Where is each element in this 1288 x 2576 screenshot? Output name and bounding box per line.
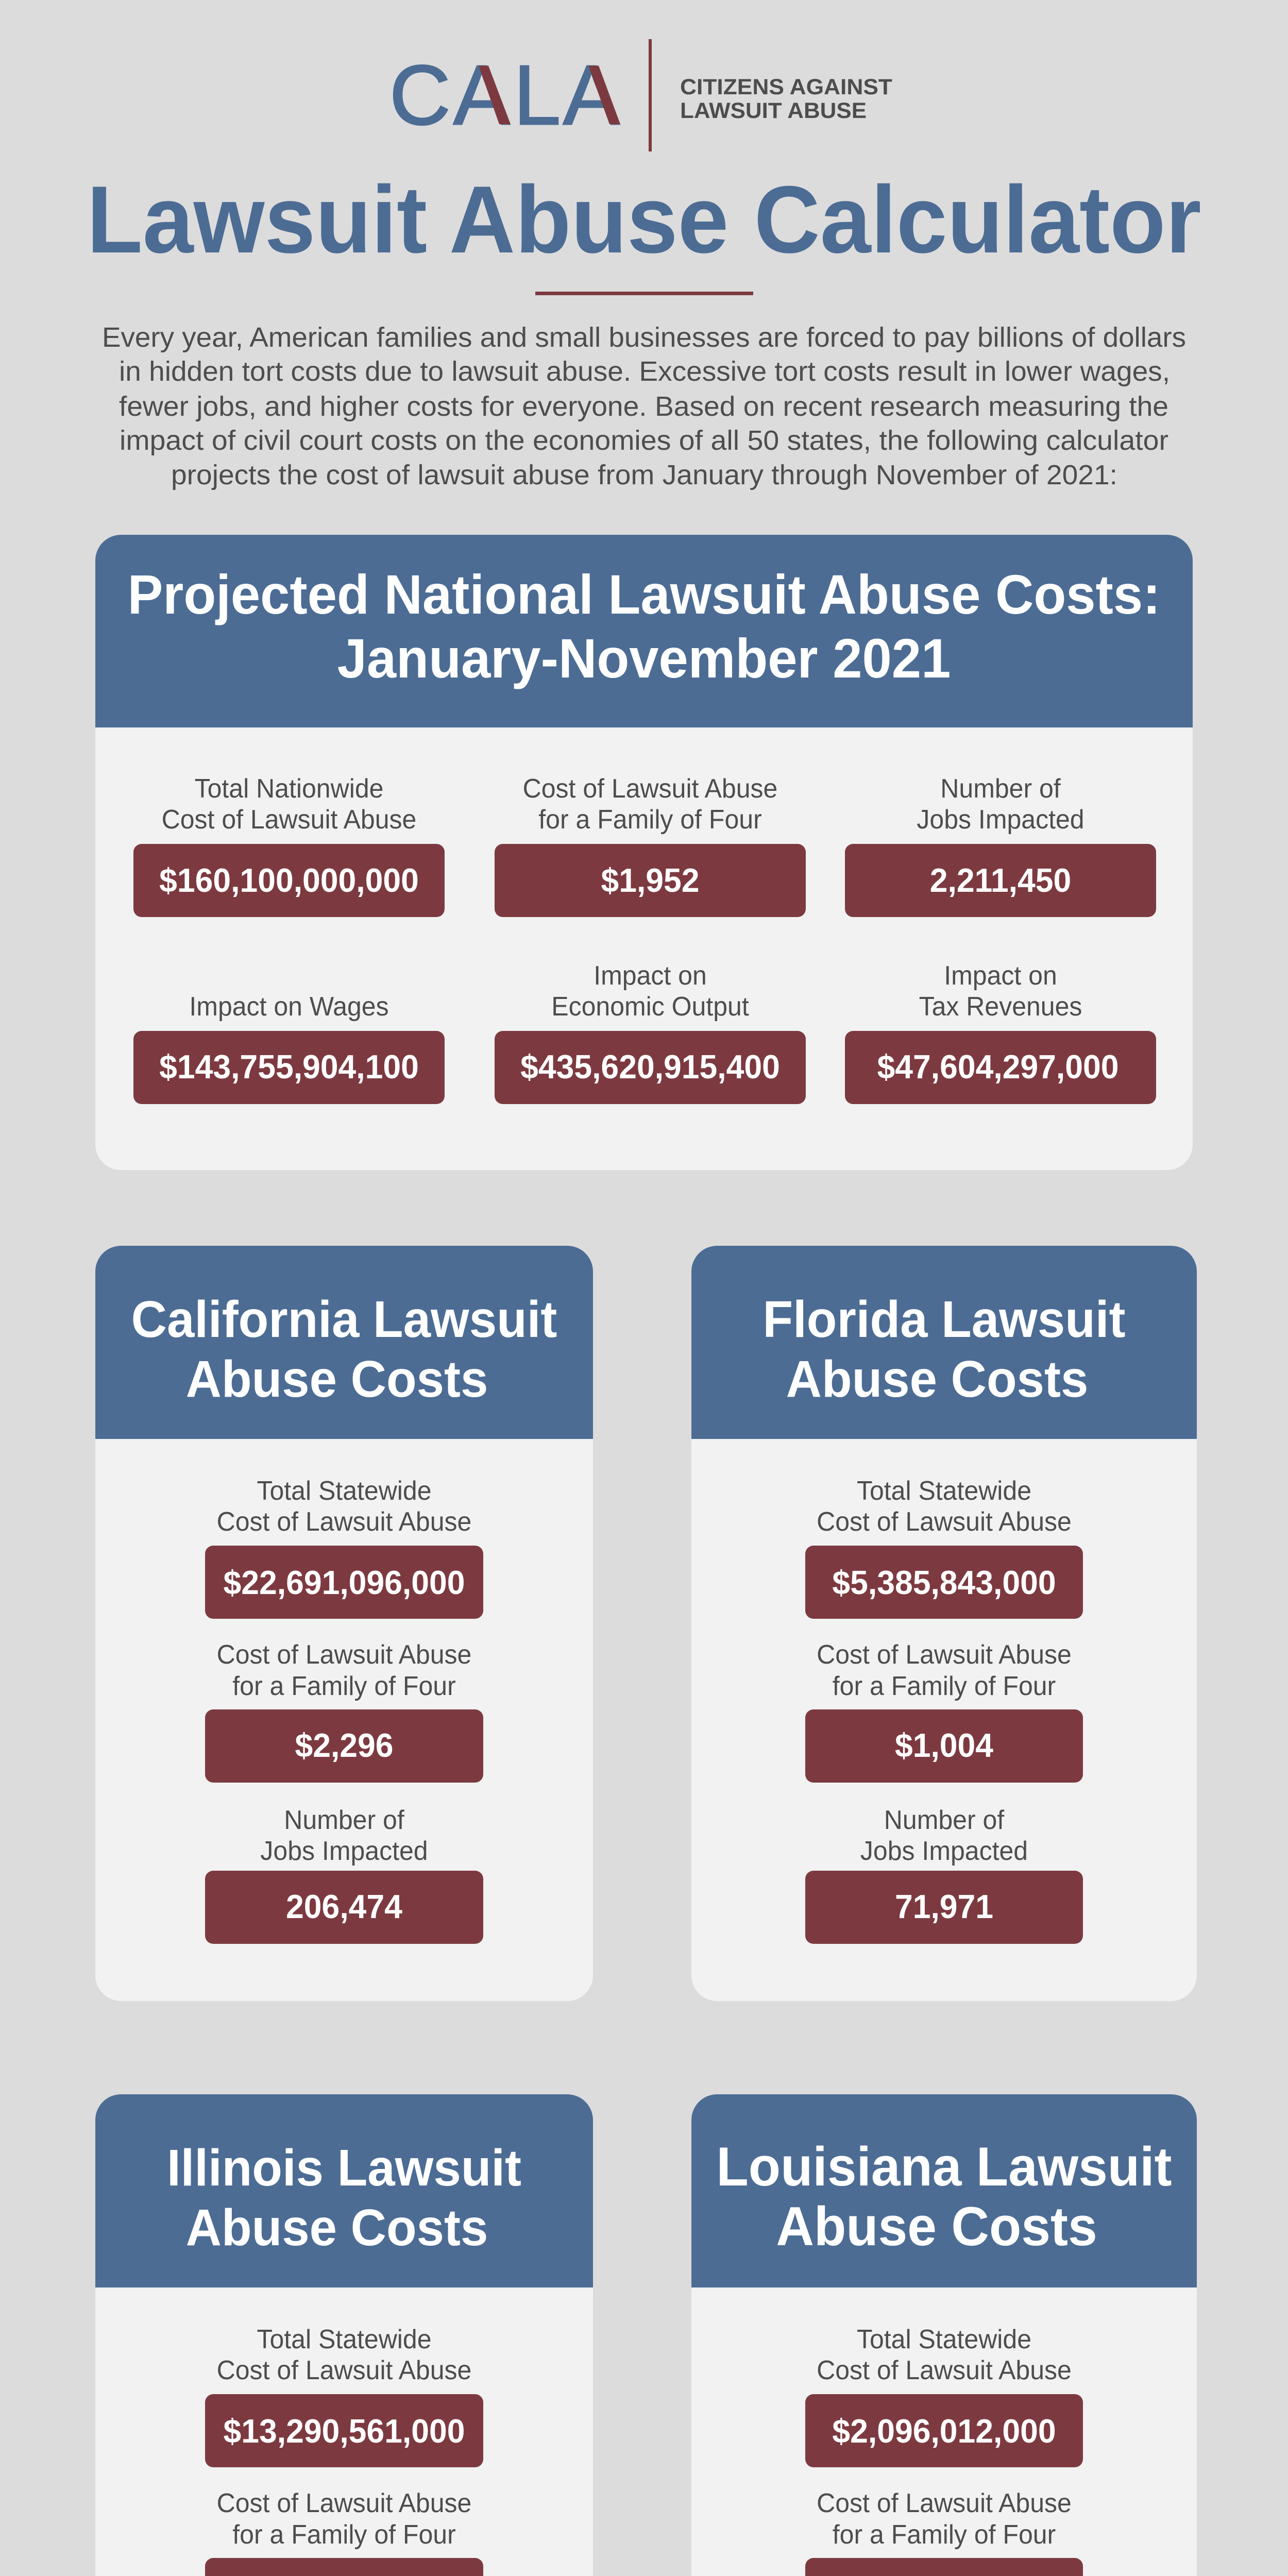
Louisiana family cost [805, 2488, 1083, 2576]
Florida header: Florida Lawsuit [762, 1290, 1126, 1348]
stat: jobs impacted: 2,211,450 [930, 861, 1071, 899]
California header [95, 1246, 593, 1439]
intro paragraph [102, 322, 1186, 490]
California header: Abuse Costs [186, 1350, 488, 1408]
stat: total nationwide: Cost of Lawsuit Abuse [162, 804, 416, 834]
logo organization name [680, 75, 892, 123]
intro paragraph: fewer jobs, and higher costs for everyone. Based on recent research measuring the [119, 391, 1168, 422]
logo divider [649, 39, 652, 151]
Florida family cost: $1,004 [895, 1726, 994, 1764]
Florida family cost [805, 1639, 1083, 1783]
national header: January-November 2021 [337, 628, 951, 689]
Florida jobs: Jobs Impacted [860, 1836, 1028, 1866]
logo organization name: CITIZENS AGAINST [680, 75, 892, 99]
Louisiana header: Abuse Costs [776, 2196, 1097, 2257]
California family cost: for a Family of Four [232, 1671, 456, 1701]
stat: jobs impacted: Jobs Impacted [917, 804, 1084, 834]
Florida header [691, 1246, 1197, 1439]
California total cost: $22,691,096,000 [223, 1564, 465, 1601]
Louisiana total cost: Cost of Lawsuit Abuse [817, 2355, 1072, 2385]
Florida jobs [805, 1805, 1083, 1944]
Louisiana header [691, 2094, 1197, 2287]
California jobs: 206,474 [286, 1888, 402, 1925]
California family cost: $2,296 [295, 1726, 394, 1764]
panel: national costs [95, 535, 1193, 1170]
Illinois family cost [205, 2488, 483, 2576]
Louisiana family cost: Cost of Lawsuit Abuse [817, 2488, 1072, 2518]
intro paragraph: in hidden tort costs due to lawsuit abuse. Excessive tort costs result in lower wages, [119, 356, 1170, 387]
California total cost: Cost of Lawsuit Abuse [217, 1506, 471, 1536]
national header: Projected National Lawsuit Abuse Costs: [128, 564, 1160, 625]
Illinois family cost: Cost of Lawsuit Abuse [217, 2488, 471, 2518]
California jobs: Number of [284, 1805, 404, 1835]
Florida jobs: 71,971 [895, 1888, 993, 1925]
Louisiana total cost [805, 2324, 1083, 2467]
stat: wages: Impact on Wages [189, 991, 389, 1021]
stat: family of four [495, 773, 806, 917]
intro paragraph: Every year, American families and small businesses are forced to pay billions of dollars [102, 322, 1186, 353]
logo red stripes [479, 66, 620, 124]
stat: economic output [495, 960, 806, 1104]
panel: California [95, 1246, 593, 2001]
Louisiana header: Louisiana Lawsuit [717, 2137, 1172, 2197]
Illinois total cost: $13,290,561,000 [223, 2412, 465, 2450]
Florida total cost: $5,385,843,000 [832, 1564, 1056, 1601]
Florida header: Abuse Costs [786, 1350, 1088, 1408]
Florida total cost: Cost of Lawsuit Abuse [817, 1506, 1072, 1536]
title: Lawsuit Abuse Calculator [87, 167, 1201, 273]
stat: tax revenues [845, 960, 1156, 1104]
California family cost: Cost of Lawsuit Abuse [217, 1639, 471, 1669]
stat: total nationwide: $160,100,000,000 [159, 861, 419, 899]
Florida total cost: Total Statewide [857, 1476, 1031, 1505]
Florida family cost: for a Family of Four [833, 1671, 1056, 1701]
national header [95, 535, 1193, 727]
Louisiana total cost: $2,096,012,000 [832, 2412, 1056, 2450]
Illinois header: Abuse Costs [186, 2198, 488, 2256]
Florida jobs: Number of [884, 1805, 1005, 1835]
stat: family of four: $1,952 [601, 861, 700, 899]
stat: family of four: for a Family of Four [538, 804, 762, 834]
logo organization name: LAWSUIT ABUSE [680, 98, 867, 123]
California family cost [205, 1639, 483, 1783]
California header: California Lawsuit [131, 1290, 557, 1348]
Louisiana family cost: for a Family of Four [833, 2519, 1056, 2549]
Illinois total cost [205, 2324, 483, 2467]
Illinois header: Illinois Lawsuit [167, 2139, 521, 2196]
stat: economic output: Impact on [594, 960, 707, 990]
stat: total nationwide [133, 773, 445, 917]
stat: tax revenues: $47,604,297,000 [877, 1048, 1119, 1086]
logo: CALA [389, 39, 892, 151]
stat: jobs impacted: Number of [940, 773, 1061, 803]
stat: family of four: Cost of Lawsuit Abuse [523, 773, 777, 803]
Florida total cost [805, 1476, 1083, 1619]
Illinois total cost: Total Statewide [257, 2324, 432, 2354]
stat: wages: $143,755,904,100 [159, 1048, 419, 1086]
California jobs: Jobs Impacted [260, 1836, 428, 1866]
panel: Florida [691, 1246, 1197, 2001]
California jobs [205, 1805, 483, 1944]
stat: economic output: $435,620,915,400 [520, 1048, 780, 1086]
intro paragraph: impact of civil court costs on the economies of all 50 states, the following calculator [120, 425, 1168, 456]
Illinois header [95, 2094, 593, 2287]
panel: Louisiana [691, 2094, 1197, 2576]
Louisiana total cost: Total Statewide [857, 2324, 1031, 2354]
logo wordmark: CALA [389, 48, 620, 142]
Illinois family cost: for a Family of Four [232, 2519, 456, 2549]
stat: jobs impacted [845, 773, 1156, 917]
stat: total nationwide: Total Nationwide [195, 773, 383, 803]
Illinois total cost: Cost of Lawsuit Abuse [217, 2355, 471, 2385]
California total cost [205, 1476, 483, 1619]
stat: tax revenues: Tax Revenues [919, 991, 1082, 1021]
California total cost: Total Statewide [257, 1476, 432, 1505]
panel: Illinois [95, 2094, 593, 2576]
stat: economic output: Economic Output [551, 991, 749, 1021]
intro paragraph: projects the cost of lawsuit abuse from January through November of 2021: [171, 460, 1117, 490]
Florida family cost: Cost of Lawsuit Abuse [817, 1639, 1072, 1669]
title underline [535, 292, 753, 295]
stat: tax revenues: Impact on [944, 960, 1057, 990]
stat: wages [133, 991, 445, 1104]
